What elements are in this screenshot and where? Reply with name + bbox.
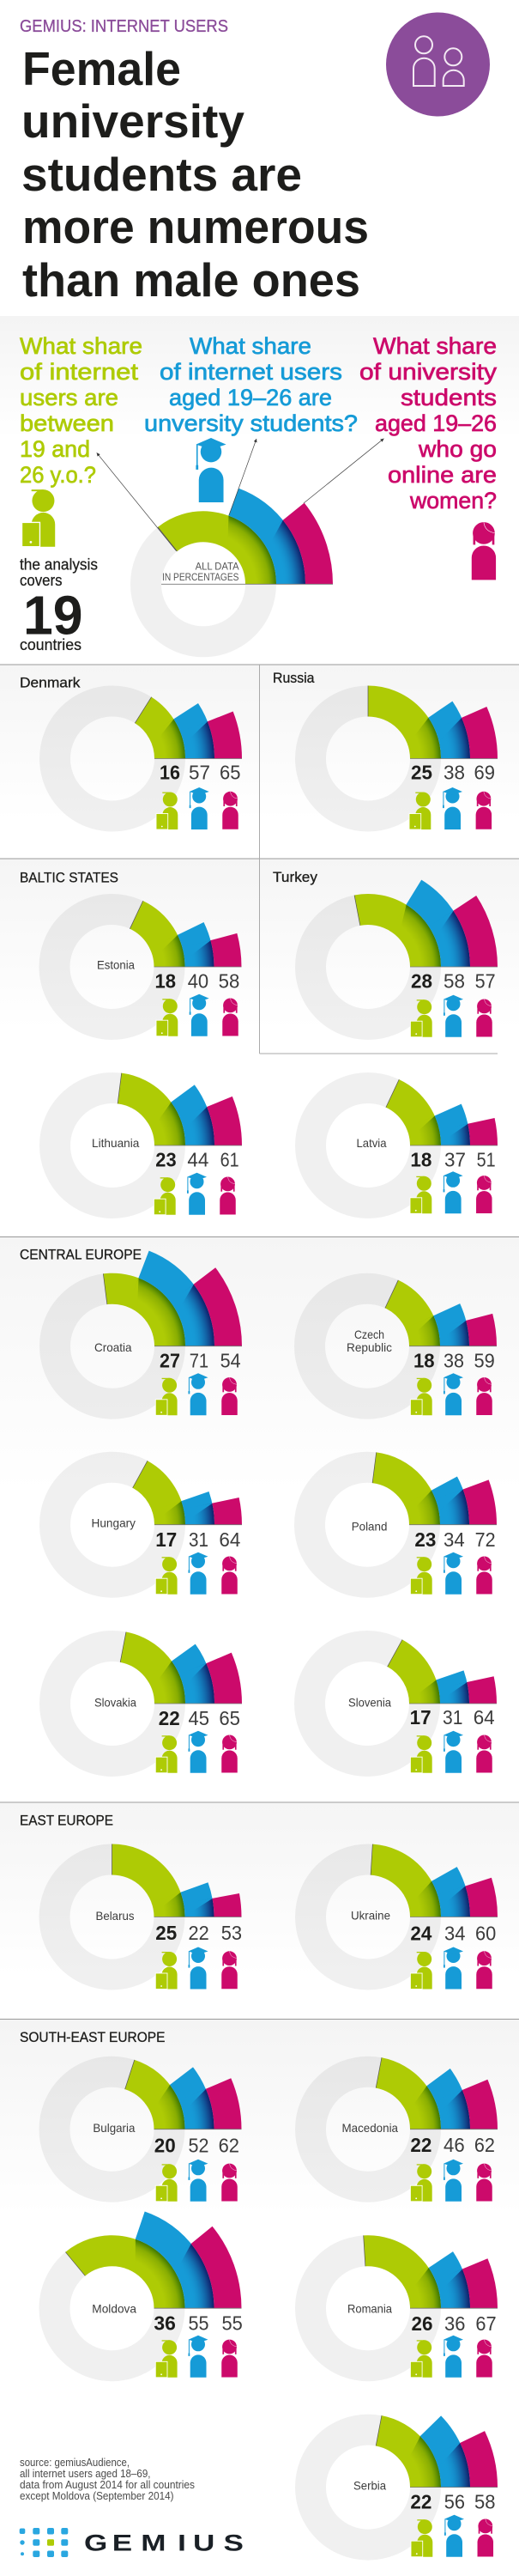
chart: Serbia <box>214 2332 519 2576</box>
chart: Hungary <box>0 1387 250 1662</box>
chart: Macedonia: 62 <box>474 2134 495 2156</box>
chart: Poland: 72 <box>475 1528 496 1551</box>
chart: Moldova: Moldova <box>92 2302 136 2316</box>
chart: Bulgaria <box>0 1977 264 2281</box>
title: Female <box>22 42 181 95</box>
heading: South-East Europe: SOUTH-EAST EUROPE <box>20 2029 165 2045</box>
chart: Hungary: Hungary <box>91 1516 136 1530</box>
chart: Latvia: 51 <box>477 1148 496 1170</box>
chart: Belarus <box>0 1782 247 2052</box>
question: share of women: What share <box>373 333 497 359</box>
icon: people in purple circle <box>386 12 490 117</box>
title <box>21 42 369 307</box>
chart: Lithuania: 61 <box>220 1148 239 1170</box>
chart: Slovenia: 31 <box>443 1706 462 1728</box>
chart: Moldova: 55 <box>189 2312 209 2334</box>
chart: Poland: 34 <box>444 1528 465 1551</box>
key chart: ALL DATA <box>196 562 239 572</box>
question: share aged 19-26: What share <box>20 333 142 359</box>
chart: Romania: Romania <box>347 2302 392 2316</box>
chart: Bulgaria: Bulgaria <box>93 2121 136 2135</box>
chart: Poland: Poland <box>352 1519 387 1533</box>
chart: Moldova <box>0 2145 275 2471</box>
chart: Hungary: 64 <box>219 1528 241 1551</box>
chart: Estonia: 58 <box>219 969 239 992</box>
chart: Turkey: 58 <box>444 970 465 993</box>
chart: Russia: 38 <box>444 762 465 784</box>
chart: Latvia <box>230 1007 506 1284</box>
question: share of university students <box>144 333 358 436</box>
chart: Macedonia <box>216 1978 519 2281</box>
source note: except Moldova (September 2014) <box>20 2490 173 2502</box>
chart: Ukraine <box>222 1771 514 2063</box>
key chart <box>40 421 366 747</box>
coverage note: countries <box>20 636 81 653</box>
title: than male ones <box>22 253 360 307</box>
chart: Croatia: 54 <box>220 1349 241 1371</box>
coverage note: 19 <box>23 584 82 646</box>
title: students are <box>21 148 302 201</box>
chart: Poland: 23 <box>414 1528 436 1551</box>
question: share of women: aged 19–26 <box>375 410 497 436</box>
chart: Lithuania: Lithuania <box>92 1136 140 1150</box>
chart: Czech Republic: 38 <box>444 1349 464 1371</box>
title: university <box>21 94 244 148</box>
chart: Croatia <box>0 1184 275 1509</box>
chart: Latvia: 37 <box>444 1148 466 1170</box>
chart: Romania: 26 <box>412 2312 432 2335</box>
icon: graduate <box>196 438 226 502</box>
chart: Poland <box>219 1376 516 1674</box>
heading: Denmark: Denmark <box>20 675 81 691</box>
chart: Denmark: 16 <box>160 762 180 784</box>
chart: Serbia: 58 <box>474 2490 496 2512</box>
chart: Russia: 25 <box>411 762 432 784</box>
question: share of women: who go <box>418 436 497 462</box>
chart: Ukraine: 34 <box>444 1922 466 1944</box>
chart: Moldova: 55 <box>221 2312 243 2334</box>
logo: Gemius: GEMIUS <box>84 2530 244 2556</box>
question: share of university students: What share <box>190 333 311 359</box>
chart: Romania <box>217 2157 519 2460</box>
chart: Slovakia: Slovakia <box>94 1695 136 1709</box>
question: share aged 19-26: users are <box>20 385 118 410</box>
question: share of university students: unversity students? <box>144 410 358 436</box>
question: share aged 19-26: 19 and <box>20 436 90 462</box>
chart: Serbia: 56 <box>444 2490 465 2512</box>
heading: Russia: Russia <box>273 670 315 686</box>
chart: Ukraine: 24 <box>410 1922 432 1944</box>
chart: Serbia: Serbia <box>353 2479 386 2493</box>
heading: East Europe: EAST EUROPE <box>20 1812 113 1828</box>
chart: Czech Republic <box>226 1205 509 1487</box>
chart: Bulgaria: 62 <box>219 2135 239 2157</box>
chart: Macedonia: 22 <box>410 2134 431 2156</box>
panel: Denmark and Russia background <box>0 665 519 859</box>
chart: Romania: 67 <box>475 2312 497 2335</box>
chart: Belarus: Belarus <box>96 1909 134 1923</box>
question: share aged 19-26: of internet <box>20 359 139 385</box>
heading: Central Europe: CENTRAL EUROPE <box>20 1247 142 1263</box>
kicker: GEMIUS: INTERNET USERS <box>20 17 228 36</box>
chart: Latvia: Latvia <box>357 1136 387 1150</box>
chart: Hungary: 17 <box>155 1528 177 1551</box>
chart: Denmark <box>0 609 263 908</box>
chart: Slovakia: 22 <box>159 1707 180 1729</box>
chart: Slovakia: 65 <box>219 1707 240 1729</box>
chart: Ukraine: 60 <box>475 1922 496 1944</box>
chart: Estonia: 40 <box>188 969 208 992</box>
chart: Slovenia <box>230 1566 504 1841</box>
chart: Romania: 36 <box>444 2312 465 2335</box>
icon: young person with tablet <box>22 489 55 547</box>
chart: Turkey: 57 <box>475 970 496 993</box>
chart: Slovakia <box>0 1552 264 1856</box>
chart: Slovenia: Slovenia <box>348 1695 391 1709</box>
panel: Baltic states background <box>0 859 519 1236</box>
heading: Turkey: Turkey <box>273 869 318 885</box>
question: share of university students: aged 19–26 are <box>169 385 332 410</box>
chart: Moldova: 36 <box>154 2312 176 2334</box>
source note: source: gemiusAudience, <box>20 2457 130 2469</box>
arrow: to pink question <box>304 439 384 503</box>
question: share aged 19-26 <box>20 333 142 488</box>
chart: Lithuania: 23 <box>155 1148 177 1170</box>
chart: Czech Republic: Czech <box>354 1327 384 1341</box>
chart: Belarus: 53 <box>221 1922 242 1944</box>
title: more numerous <box>22 200 369 253</box>
chart: Slovenia: 64 <box>474 1706 495 1728</box>
chart: Czech Republic: 59 <box>474 1349 495 1371</box>
chart: Turkey <box>208 806 519 1127</box>
chart: Slovakia: 45 <box>189 1707 209 1729</box>
heading: Baltic states: BALTIC STATES <box>20 869 118 885</box>
chart: Lithuania: 44 <box>187 1148 209 1170</box>
coverage note: the analysis <box>20 556 98 573</box>
question: share aged 19-26: between <box>20 410 114 436</box>
chart: Serbia: 22 <box>410 2490 431 2512</box>
chart: Estonia: 18 <box>154 969 176 992</box>
chart: Ukraine: Ukraine <box>351 1908 390 1922</box>
chart: Slovenia: 17 <box>410 1706 431 1728</box>
chart: Denmark: 65 <box>220 762 240 784</box>
chart: Russia: 69 <box>474 762 495 784</box>
panel: East Europe background <box>0 1802 519 2019</box>
source note <box>20 2457 195 2502</box>
chart: Hungary: 31 <box>189 1528 208 1551</box>
key chart: IN PERCENTAGES <box>162 573 239 583</box>
panel: how to read background <box>0 316 519 665</box>
chart: Macedonia: Macedonia <box>341 2121 398 2135</box>
source note: all internet users aged 18–69, <box>20 2468 151 2480</box>
chart: Belarus: 25 <box>155 1922 177 1944</box>
question: share of university students: of internet users <box>160 359 342 385</box>
coverage note: covers <box>20 572 62 589</box>
arrow: to green question <box>97 453 177 551</box>
chart: Macedonia: 46 <box>444 2134 465 2156</box>
question: share of women: of university <box>359 359 498 385</box>
question: share aged 19-26: 26 y.o.? <box>20 462 96 488</box>
chart: Czech Republic: Republic <box>347 1340 392 1354</box>
source note: data from August 2014 for all countries <box>20 2479 195 2491</box>
question: share of women: students <box>401 385 497 410</box>
question: share of women <box>359 333 498 513</box>
chart: Estonia: Estonia <box>97 957 135 971</box>
icon: woman <box>471 522 496 580</box>
chart: Croatia: 27 <box>160 1349 180 1371</box>
logo: Gemius <box>20 2528 244 2557</box>
chart: Denmark: 57 <box>189 762 210 784</box>
arrow: to blue question <box>229 439 256 515</box>
chart: Croatia: Croatia <box>94 1340 132 1354</box>
panel: South-East Europe background <box>0 2019 519 2576</box>
chart: Belarus: 22 <box>189 1922 209 1944</box>
chart: Estonia <box>0 825 254 1109</box>
chart: Croatia: 71 <box>190 1349 208 1371</box>
coverage note <box>20 556 98 653</box>
chart: Lithuania <box>0 994 263 1297</box>
question: share of women: women? <box>409 488 497 513</box>
question: share of women: online are <box>388 462 497 488</box>
chart: Russia <box>215 606 519 911</box>
chart: Czech Republic: 18 <box>413 1349 435 1371</box>
chart: Turkey: 28 <box>411 970 432 993</box>
chart: Latvia: 18 <box>410 1148 432 1170</box>
chart: Bulgaria: 52 <box>189 2135 209 2157</box>
chart: Bulgaria: 20 <box>154 2135 176 2157</box>
panel: Central Europe background <box>0 1236 519 1802</box>
